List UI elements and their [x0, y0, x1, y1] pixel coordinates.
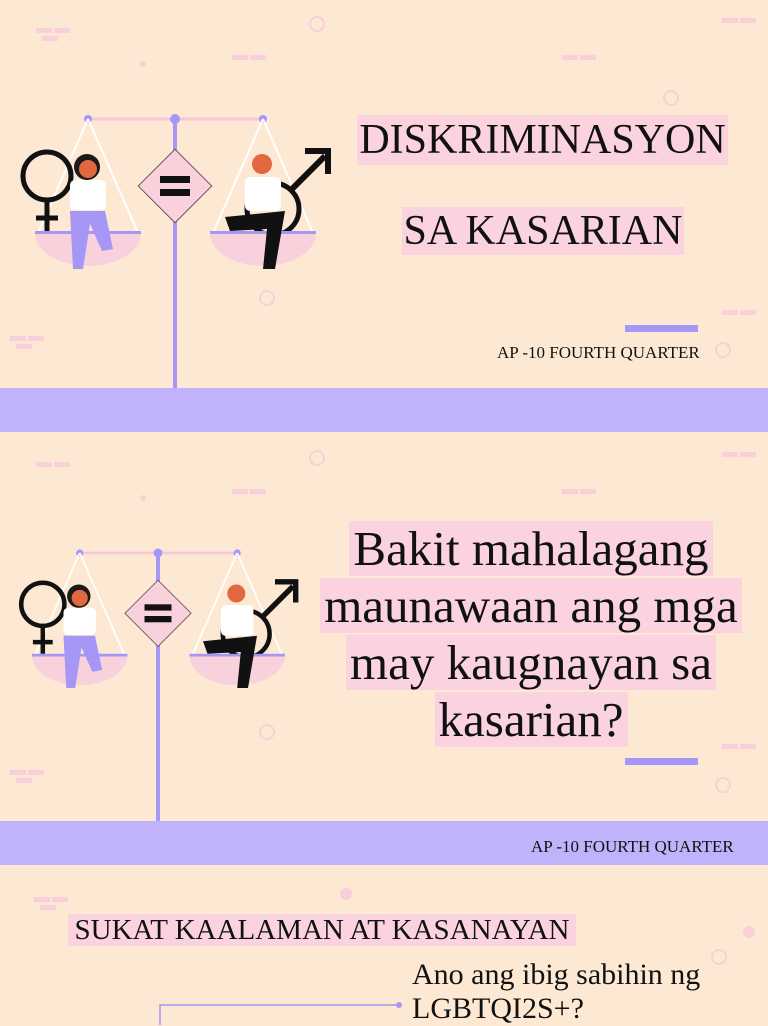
question heading: kasarian?	[438, 692, 624, 747]
question text	[412, 958, 700, 1025]
caption 2: AP -10 FOURTH QUARTER	[531, 837, 734, 856]
question heading: may kaugnayan sa	[350, 635, 712, 690]
question text: Ano ang ibig sabihin ng	[412, 958, 700, 991]
scale illustration 1	[20, 114, 331, 388]
connector	[159, 1002, 402, 1025]
accent bar	[625, 325, 698, 332]
scale illustration 2	[18, 548, 298, 821]
title: DISKRIMINASYON	[359, 117, 726, 163]
question heading	[320, 521, 742, 747]
band 2	[0, 821, 768, 865]
section heading: SUKAT KAALAMAN AT KASANAYAN	[75, 914, 569, 946]
subtitle: SA KASARIAN	[404, 208, 682, 254]
accent bar 2	[625, 758, 698, 765]
question heading: Bakit mahalagang	[353, 521, 709, 576]
caption 1: AP -10 FOURTH QUARTER	[497, 343, 700, 362]
band 1	[0, 388, 768, 432]
question heading: maunawaan ang mga	[324, 578, 738, 633]
question text: LGBTQI2S+?	[412, 992, 584, 1025]
